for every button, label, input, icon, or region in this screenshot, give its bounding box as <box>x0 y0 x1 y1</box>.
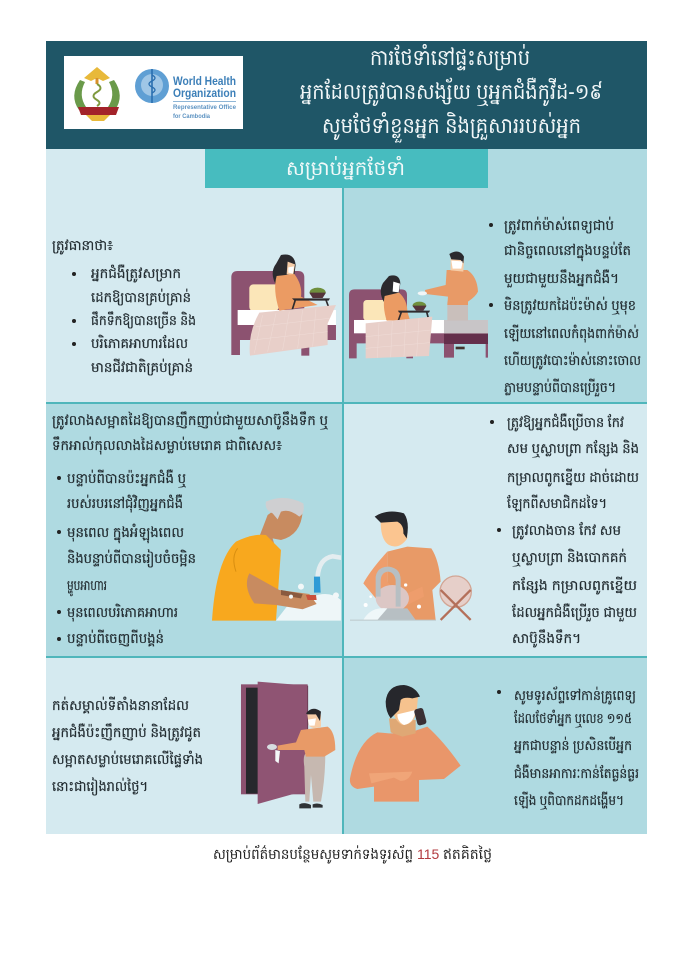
text block: wear a mask: ភ្លាមបន្ទាប់ពីបានប្រើរួច។ <box>504 378 616 397</box>
text block: hand washing: និងបន្ទាប់ពីបានរៀបចំចម្អិន <box>67 549 196 568</box>
text block: call for help <box>497 686 639 810</box>
text block: ensure rest: មានជីវជាតិគ្រប់គ្រាន់ <box>91 358 193 376</box>
text block: hand washing <box>52 411 328 647</box>
text block: hand washing: មុនពេល ក្នុងអំឡុងពេល <box>67 523 184 544</box>
subheading <box>205 149 488 188</box>
panel: header banner <box>46 41 647 149</box>
text block: separate utensils: កម្រាលពូកខ្នើយ ដាច់ដោយ <box>507 468 639 487</box>
text block: hand washing: របស់របរនៅជុំវិញអ្នកជំងឺ <box>67 494 183 513</box>
text block: ensure rest: ផឹកទឹកឱ្យបានច្រើន និង <box>91 311 196 329</box>
logo box: for Cambodia <box>173 113 210 120</box>
icon: WHO emblem <box>135 69 169 103</box>
text block: separate utensils <box>490 413 639 648</box>
text block: call for help: សូមទូរស័ព្ទទៅកាន់គ្រូពេទ្យ <box>514 686 636 705</box>
text block: ensure rest: ដេកឱ្យបានគ្រប់គ្រាន់ <box>91 288 191 306</box>
title <box>300 44 603 143</box>
text block: clean surfaces: នោះជារៀងរាល់ថ្ងៃ។ <box>52 777 148 796</box>
panel: row 2 left <box>46 403 343 657</box>
text block: ensure rest: អ្នកជំងឺត្រូវសម្រាក <box>91 264 181 283</box>
text block: hand washing: បន្ទាប់ពីចេញពីបង្គន់ <box>67 629 164 647</box>
text block: clean surfaces <box>52 696 203 796</box>
text block: wear a mask <box>489 216 641 397</box>
text block: ensure rest: បរិភោគអាហារដែល <box>91 334 188 351</box>
text block: wear a mask: ឡើយនៅពេលកំពុងពាក់ម៉ាស់ <box>504 324 639 343</box>
text block: separate utensils: ត្រូវឱ្យអ្នកជំងឺប្រើចាន កែវ <box>507 413 625 432</box>
panel: row 3 left <box>46 657 343 834</box>
text block: separate utensils: ឡែកពីសមាជិកដទៃ។ <box>507 494 607 512</box>
logo box: Organization <box>173 86 236 100</box>
text block: call for help: ជំងឺមានអាការៈកាន់តែធ្ងន់ធ្ងរ <box>514 764 639 782</box>
WHO office: Representative Office <box>173 104 236 111</box>
footer note: សម្រាប់ព័ត៌មានបន្ថែមសូមទាក់ទងទូរស័ព្ទ <box>213 844 413 864</box>
illustration: patient resting in bed <box>231 255 336 356</box>
text block: wear a mask: មួយជាមួយនឹងអ្នកជំងឺ។ <box>504 269 619 288</box>
title: អ្នកដែលត្រូវបានសង្ស័យ ឬអ្នកជំងឺកូវីដ-១៩ <box>300 77 603 107</box>
title: សូមថែទាំខ្លួនអ្នក និងគ្រួសាររបស់អ្នក <box>322 112 581 143</box>
text block: hand washing: មុនពេលបរិភោគអាហារ <box>67 603 178 622</box>
illustration: man cleaning door handle <box>241 682 335 808</box>
text block: call for help: ដែលថែទាំអ្នក ឬលេខ ១១៥ <box>514 709 632 728</box>
text block: call for help: ឡើង ឬពិបាកដកដង្ហើម។ <box>514 791 624 810</box>
text block: ensure rest <box>52 237 196 376</box>
WHO name: World Health <box>173 74 236 88</box>
title: ការថែទាំនៅផ្ទះសម្រាប់ <box>370 44 530 71</box>
text block: wear a mask: ត្រូវពាក់ម៉ាស់ពេទ្យជាប់ <box>504 216 614 235</box>
text block: hand washing: ម្ហូបអាហារ <box>67 577 107 597</box>
text block: ensure rest: ត្រូវធានាថា៖ <box>52 237 113 255</box>
footer note: ឥតគិតថ្លៃ <box>443 845 492 863</box>
text block: wear a mask: ជានិច្ចពេលនៅក្នុងបន្ទប់តែ <box>504 241 631 262</box>
panel: row 1 left <box>46 149 343 403</box>
illustration: man washing dishes <box>350 511 471 621</box>
text block: call for help: អ្នកជាបន្ទាន់ ប្រសិនបើអ្នក <box>514 736 632 754</box>
text block: separate utensils: ដែលអ្នកជំងឺប្រើរួច ជាមួយ <box>512 603 637 622</box>
text block: wear a mask: ហើយត្រូវបោះម៉ាស់នោះចោល <box>504 351 641 370</box>
illustration: older man washing hands <box>212 498 341 621</box>
icon: ministry of health emblem <box>74 67 120 121</box>
text block: separate utensils: ត្រូវលាងចាន កែវ សម <box>512 522 621 540</box>
text block: separate utensils: កន្សែង កម្រាលពូកខ្នើយ <box>512 576 637 595</box>
illustration: man phoning with mask <box>350 685 461 802</box>
illustration: carer bringing food to patient <box>349 252 488 358</box>
text block: separate utensils: សាប៊ូនឹងទឹក។ <box>512 629 581 648</box>
text block: hand washing: ត្រូវលាងសម្អាតដៃឱ្យបានញឹកញាប់ជាមួយសាប៊ូនឹងទឹក ឬ <box>52 411 328 430</box>
text block: clean surfaces: កត់សម្គាល់ទីតាំងនានាដែល <box>52 696 189 714</box>
text block: hand washing: បន្ទាប់ពីបានប៉ះអ្នកជំងឺ ឬ <box>67 469 186 488</box>
text block: hand washing: ទឹកអាល់កុលលាងដៃសម្លាប់មេរោគ ជាពិសេស៖ <box>52 436 282 455</box>
panel: row 1 right <box>343 149 647 403</box>
footer note: 115 <box>417 846 440 862</box>
logo box <box>64 56 243 129</box>
text block: separate utensils: សម ឬស្លាបព្រា កន្សែង និង <box>507 439 639 458</box>
text block: clean surfaces: សម្អាតសម្លាប់មេរោគលើផ្ទៃទាំង <box>52 750 203 768</box>
text block: clean surfaces: អ្នកជំងឺប៉ះញឹកញាប់ និងត្រូវជូត <box>52 723 201 742</box>
text block: wear a mask: មិនត្រូវយកដៃប៉ះម៉ាស់ ឬមុខ <box>504 296 636 315</box>
panel: row 2 right <box>343 403 647 657</box>
panel: row 3 right <box>343 657 647 834</box>
subheading: សម្រាប់អ្នកថែទាំ <box>286 155 405 180</box>
footer note <box>213 844 492 864</box>
text block: separate utensils: ឬស្លាបព្រា និងបោកគក់ <box>512 548 627 567</box>
